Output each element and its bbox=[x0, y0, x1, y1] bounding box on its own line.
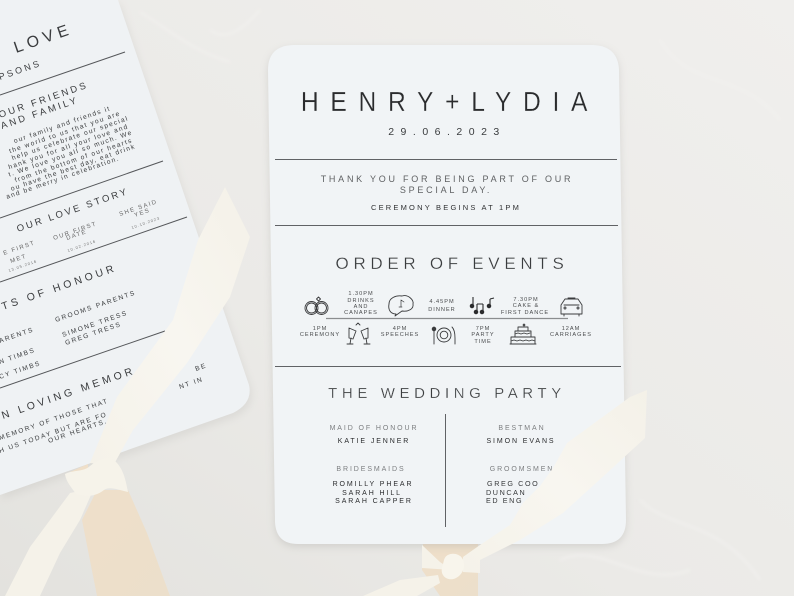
label: cake and first dance: CAKE & bbox=[513, 303, 539, 309]
left card headings: OUR LOVE STORY bbox=[15, 186, 130, 235]
thank you message: SPECIAL DAY. bbox=[400, 185, 492, 195]
wedding party: right column: DUNCAN bbox=[486, 488, 526, 497]
left card headings: LOVE bbox=[12, 21, 75, 57]
wedding party: right column bbox=[486, 425, 556, 505]
section rules bbox=[275, 160, 621, 527]
left card honour names: OUR HEARTS. bbox=[47, 418, 109, 445]
left card body text: hank you for all your love and bbox=[8, 123, 130, 171]
left card love story columns bbox=[3, 199, 161, 273]
icon: plate and cutlery bbox=[432, 327, 455, 344]
left card body text: our family and friends it bbox=[13, 105, 112, 145]
panel: main fan card bbox=[268, 45, 626, 547]
label: cake and first dance bbox=[501, 297, 549, 316]
label: drinks and canapes: CANAPES bbox=[344, 310, 378, 316]
wedding party: right column: SIMON EVANS bbox=[486, 438, 556, 445]
label: party time bbox=[471, 326, 495, 345]
label: drinks and canapes: 1.30PM bbox=[348, 291, 374, 297]
label: drinks and canapes: AND bbox=[354, 304, 368, 310]
wedding party: left column: SARAH HILL bbox=[342, 490, 402, 497]
heading: order of events: ORDER OF EVENTS bbox=[336, 254, 568, 273]
left card love story columns: OUR FIRST bbox=[53, 221, 98, 242]
left card honour names: GROOMS PARENTS bbox=[54, 290, 137, 324]
left card body text: ou have the best day, eat drink bbox=[10, 143, 137, 193]
label: party time: PARTY bbox=[471, 332, 495, 338]
wedding party: left column: BRIDESMAIDS bbox=[336, 466, 406, 473]
label: cake and first dance: FIRST DANCE bbox=[501, 310, 549, 316]
label: ceremony bbox=[300, 326, 340, 338]
label: carriages: 12AM bbox=[562, 326, 580, 332]
left card honour names: MEMORY OF THOSE THAT bbox=[0, 398, 110, 442]
left card honour names: SIMONE TRESS bbox=[61, 310, 129, 339]
wooden handle: main fan bbox=[422, 544, 478, 596]
wedding party: left column: KATIE JENNER bbox=[338, 438, 410, 445]
left card love story columns: 10.02.2016 bbox=[67, 238, 97, 253]
ribbon: main fan bbox=[363, 390, 647, 596]
left card headings bbox=[0, 21, 137, 422]
wedding party: right column: BESTMAN bbox=[498, 425, 546, 432]
left card headings: AND FAMILY bbox=[0, 95, 80, 132]
label: dinner bbox=[428, 299, 456, 313]
ceremony time: CEREMONY BEGINS AT 1PM bbox=[371, 203, 521, 212]
panel: left fan card bbox=[0, 0, 252, 499]
wedding party: left column: SARAH CAPPER bbox=[335, 498, 413, 505]
wooden handle: left fan bbox=[70, 464, 170, 596]
thank you message: THANK YOU FOR BEING PART OF OUR bbox=[321, 174, 573, 184]
left card body text: help us celebrate our special bbox=[11, 115, 130, 162]
thank you message bbox=[321, 174, 573, 195]
left card love story columns: DATE bbox=[66, 229, 88, 242]
label: drinks and canapes bbox=[344, 291, 378, 316]
wedding party: right column: ED ENG bbox=[486, 496, 523, 505]
left card love story columns: E FIRST bbox=[3, 240, 36, 257]
icon: car bbox=[561, 298, 582, 316]
wedding party: left column bbox=[330, 425, 418, 505]
left card rules bbox=[0, 52, 187, 388]
heading: the wedding party: THE WEDDING PARTY bbox=[328, 385, 566, 402]
icon: wedding cake bbox=[510, 324, 536, 344]
label: speeches: SPEECHES bbox=[381, 332, 419, 338]
left card honour names: GREG TRESS bbox=[64, 321, 123, 347]
icon: music notes bbox=[470, 297, 494, 314]
label: dinner: 4.45PM bbox=[429, 299, 455, 305]
left card body text: and be merry in celebration. bbox=[5, 155, 121, 201]
label: party time: 7PM bbox=[476, 326, 490, 332]
label: carriages bbox=[550, 326, 592, 338]
left card headings: N LOVING MEMOR bbox=[0, 365, 137, 422]
left card honour names: H US TODAY BUT ARE FO bbox=[0, 411, 108, 455]
left card body text: from the bottom of our hearts bbox=[14, 137, 134, 184]
left card body text bbox=[5, 105, 137, 201]
date: 29.06.2023 bbox=[388, 126, 506, 138]
label: dinner: DINNER bbox=[428, 307, 456, 313]
label: ceremony: CEREMONY bbox=[300, 332, 340, 338]
label: speeches bbox=[381, 326, 419, 338]
left card love story columns: MET bbox=[10, 254, 28, 265]
left card love story columns: YES bbox=[134, 208, 151, 219]
left card love story columns: 10.10.2023 bbox=[131, 215, 161, 230]
label: speeches: 4PM bbox=[393, 326, 407, 332]
wedding party: left column: ROMILLY PHEAR bbox=[333, 481, 413, 488]
icon: champagne glasses bbox=[347, 323, 370, 344]
title: HENRY+LYDIA bbox=[301, 86, 599, 117]
left card body text: t. We love you all so much. We bbox=[8, 129, 134, 178]
left card headings: TS OF HONOUR bbox=[0, 262, 119, 313]
timeline bbox=[300, 291, 592, 345]
left card honour names: NT IN bbox=[178, 376, 204, 391]
wedding party: left column: MAID OF HONOUR bbox=[330, 425, 418, 432]
label: ceremony: 1PM bbox=[313, 326, 327, 332]
ribbon: left fan bbox=[5, 187, 250, 596]
left card headings: OUR FRIENDS bbox=[0, 80, 90, 121]
left card love story columns: 13.05.2016 bbox=[8, 258, 38, 273]
wedding party: right column: GREG COO bbox=[487, 479, 539, 488]
icon: rings bbox=[305, 297, 328, 314]
left card honour names bbox=[0, 290, 208, 455]
left card love story columns: SHE SAID bbox=[119, 199, 158, 218]
icon: speech bubble bbox=[389, 296, 413, 316]
label: carriages: CARRIAGES bbox=[550, 332, 592, 338]
left card honour names: BE bbox=[194, 362, 208, 373]
wedding party: right column: GROOMSMEN bbox=[490, 466, 554, 473]
label: drinks and canapes: DRINKS bbox=[347, 298, 375, 304]
label: cake and first dance: 7.30PM bbox=[513, 297, 539, 303]
left card body text: the world to us that you are bbox=[8, 110, 122, 155]
label: party time: TIME bbox=[474, 339, 492, 345]
